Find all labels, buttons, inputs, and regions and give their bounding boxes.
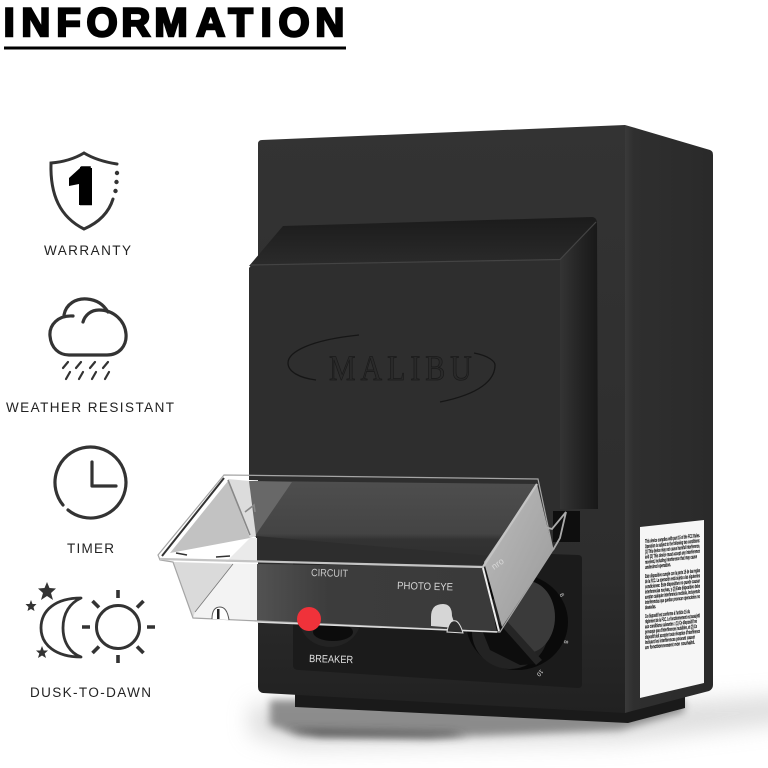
rating label: un fonctionnement non souhaité.	[645, 640, 695, 651]
rating label	[640, 520, 704, 698]
product shadow	[250, 695, 768, 748]
panel label: photo eye: PHOTO EYE	[397, 580, 453, 593]
clear flip-up lid	[158, 475, 566, 632]
lid front face over white	[173, 562, 257, 622]
icon: dusk to dawn moon and sun	[26, 582, 155, 663]
lid front face over product	[257, 564, 497, 632]
lid right wall	[484, 484, 553, 627]
hood right side	[560, 222, 598, 509]
enclosure side face	[625, 125, 713, 713]
red breaker button	[297, 607, 321, 631]
panel label: circuit: CIRCUIT	[311, 567, 349, 580]
embossed brand logo: MALIBU	[329, 350, 472, 389]
lid outline and flange	[158, 475, 553, 632]
panel label: breaker: BREAKER	[309, 653, 354, 666]
title: INFORMATION	[4, 1, 344, 45]
enclosure base	[295, 692, 685, 723]
icon: rain cloud	[50, 299, 126, 379]
photo eye sensor	[431, 604, 463, 633]
embossed brand logo	[288, 335, 495, 402]
product: power pack enclosure: condiciones: Este dispositivo no puede causar	[645, 578, 700, 590]
terminal panel	[293, 545, 582, 688]
rating label: aux conditions suivantes : (1) Ce dispositif ne	[645, 619, 697, 630]
product: power pack enclosure: received, including interference that may cause	[645, 554, 697, 566]
rating label: deseadas.	[645, 604, 656, 611]
circuit breaker socket	[299, 589, 361, 647]
hood front face	[249, 259, 560, 486]
rating label: incluant les interférences pouvant causer	[645, 635, 695, 646]
icon: clock timer	[55, 447, 126, 518]
hinge recess	[553, 511, 580, 542]
product: power pack enclosure: provoque pas d'interférences nuisibles, et (2) Ce	[645, 624, 697, 636]
lid hinge tabs	[228, 480, 255, 535]
timer dial: 6	[558, 593, 565, 599]
lid wall imprint: nro	[489, 556, 506, 572]
label: weather resistant: WEATHER RESISTANT	[6, 400, 174, 415]
label: dusk-to-dawn: DUSK-TO-DAWN	[30, 685, 151, 700]
label: warranty: WARRANTY	[44, 243, 131, 258]
rating label: undesired operation.	[645, 562, 671, 571]
rating label: Ce dispositif est conforme à l'article 15 du	[645, 609, 690, 620]
label: timer: TIMER	[67, 541, 114, 556]
hood top face	[249, 217, 597, 266]
icon: one year warranty shield: 1	[70, 158, 98, 214]
timer dial: 10	[534, 668, 544, 677]
icon: one year warranty shield	[51, 153, 119, 229]
lid notch left	[212, 607, 229, 620]
lid left wall	[170, 481, 250, 553]
timer dial: 8	[562, 640, 568, 644]
product: power pack enclosure: and (2) This device must accept any interference	[645, 549, 700, 561]
product: power pack enclosure	[158, 125, 713, 723]
enclosure front face	[258, 125, 625, 713]
timer dial	[466, 574, 568, 677]
lid back panel	[249, 481, 538, 562]
